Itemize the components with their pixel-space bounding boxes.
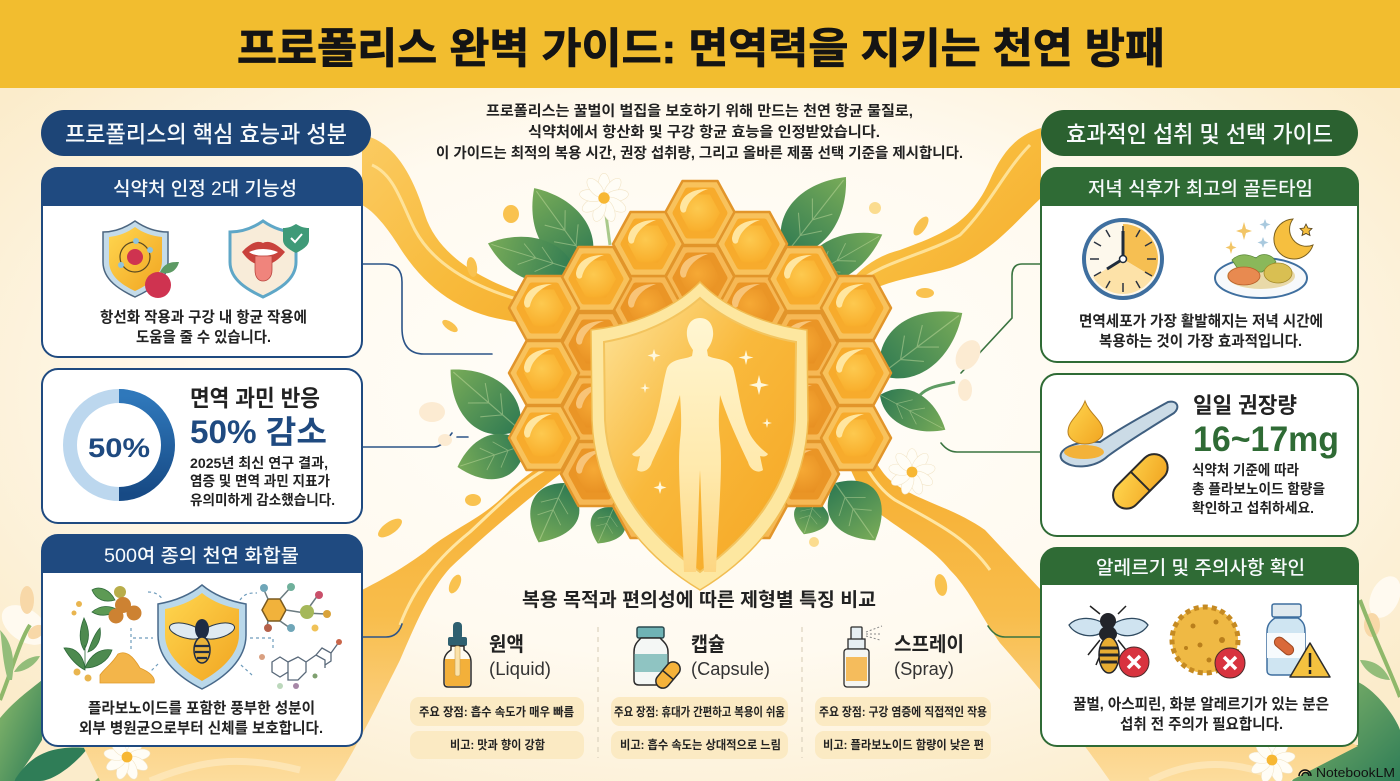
stat text: 염증 및 면역 과민 지표가 bbox=[190, 473, 330, 489]
comparison heading: 복용 목적과 편의성에 따른 제형별 특징 비교 bbox=[522, 589, 876, 611]
icon: molecules bbox=[259, 583, 342, 689]
donut chart: 50%: 50% bbox=[88, 433, 150, 463]
text: card body bbox=[100, 309, 307, 346]
panel: allergy caution bbox=[1041, 548, 1358, 746]
text: card body bbox=[1079, 313, 1323, 350]
panel: evening golden time bbox=[1041, 168, 1358, 362]
panel: daily dose bbox=[1041, 374, 1358, 536]
text: card body bbox=[79, 700, 323, 737]
dividers bbox=[598, 627, 802, 758]
form: spray: 주요 장점: 구강 염증에 직접적인 작용 bbox=[819, 705, 987, 719]
icon: pollen warning bbox=[1172, 607, 1245, 678]
stat text: 총 플라보노이드 함량을 bbox=[1192, 481, 1325, 497]
pill heading: left: 프로폴리스의 핵심 효능과 성분 bbox=[65, 121, 347, 147]
stat text bbox=[1192, 393, 1339, 516]
icon: plants and resin bbox=[64, 586, 154, 683]
panel: evening golden time: 저녁 식후가 최고의 골든타임 bbox=[1088, 178, 1313, 200]
honeycomb bbox=[509, 181, 891, 538]
text: card body: 면역세포가 가장 활발해지는 저녁 시간에 bbox=[1079, 313, 1323, 330]
form: liquid: 비고: 맛과 향이 강함 bbox=[450, 737, 545, 752]
intro text: 식약처에서 항산화 및 구강 항균 효능을 인정받았습니다. bbox=[528, 124, 880, 141]
icon: spray bottle bbox=[844, 626, 882, 687]
form: capsule: (Capsule) bbox=[691, 659, 770, 679]
panel: allergy caution: 알레르기 및 주의사항 확인 bbox=[1096, 557, 1305, 579]
corner plant: bottom left bbox=[0, 586, 128, 781]
icon: spoon and capsule bbox=[1061, 401, 1177, 514]
panel: FDA two functions: 식약처 인정 2대 기능성 bbox=[113, 178, 297, 200]
stat text bbox=[190, 385, 335, 508]
shield with human silhouette bbox=[591, 282, 808, 590]
panel: FDA two functions bbox=[42, 168, 362, 357]
icon: dinner plate with moon bbox=[1215, 219, 1313, 298]
stat text: 16~17mg bbox=[1193, 420, 1339, 459]
form: spray: 비고: 플라보노이드 함량이 낮은 편 bbox=[823, 737, 984, 752]
panel: 50 percent reduction bbox=[42, 369, 362, 523]
stat text: 식약처 기준에 따라 bbox=[1192, 462, 1299, 478]
stat text: 면역 과민 반응 bbox=[190, 385, 320, 411]
form: capsule: 비고: 흡수 속도는 상대적으로 느림 bbox=[620, 738, 781, 752]
stat text: 2025년 최신 연구 결과, bbox=[190, 455, 328, 471]
stat text: 일일 권장량 bbox=[1193, 393, 1297, 418]
icon: dropper bottle bbox=[444, 622, 471, 687]
intro text bbox=[436, 103, 963, 162]
stat text: 확인하고 섭취하세요. bbox=[1192, 500, 1314, 516]
title bar bbox=[0, 0, 1400, 88]
leaves behind honeycomb bbox=[432, 161, 977, 554]
connector lines bbox=[362, 264, 1041, 637]
text: card body: 항선화 작용과 구강 내 항균 작용에 bbox=[100, 309, 307, 326]
stat text: 50% 감소 bbox=[190, 414, 327, 450]
panel: 500 natural compounds: 500여 종의 천연 화합물 bbox=[104, 545, 299, 567]
icon: oral care shield bbox=[230, 221, 309, 297]
corner plant: bottom right bbox=[1292, 571, 1400, 781]
form: liquid: 주요 장점: 흡수 속도가 매우 빠름 bbox=[419, 704, 574, 719]
text: card body: 도움을 줄 수 있습니다. bbox=[136, 329, 271, 346]
pill heading: right bbox=[1041, 110, 1358, 156]
text: card body bbox=[1073, 696, 1329, 733]
flowers bbox=[103, 173, 1296, 781]
form: spray: (Spray) bbox=[894, 659, 954, 679]
form: spray: 스프레이 bbox=[894, 633, 964, 656]
form: liquid: (Liquid) bbox=[489, 659, 551, 679]
text: card body: 꿀벌, 아스피린, 화분 알레르기가 있는 분은 bbox=[1073, 696, 1329, 713]
icon: bee shield bbox=[158, 585, 246, 689]
text: card body: 섭취 전 주의가 필요합니다. bbox=[1120, 716, 1283, 733]
honey stream: upper left bbox=[362, 135, 584, 365]
donut chart: 50% bbox=[70, 396, 168, 494]
title: 프로폴리스 완벽 가이드: 면역력을 지키는 천연 방패 bbox=[237, 25, 1165, 72]
NotebookLM watermark: NotebookLM bbox=[1316, 766, 1395, 780]
intro text: 프로폴리스는 꿀벌이 벌집을 보호하기 위해 만드는 천연 항균 물질로, bbox=[486, 103, 913, 120]
text: card body: 복용하는 것이 가장 효과적입니다. bbox=[1099, 333, 1302, 350]
form: liquid: 원액 bbox=[489, 633, 524, 656]
honey droplets bbox=[375, 202, 949, 597]
form: liquid bbox=[410, 622, 584, 759]
icon: bottle and capsule bbox=[634, 627, 683, 691]
form: spray bbox=[815, 626, 991, 759]
form: capsule: 캡슐 bbox=[691, 633, 725, 656]
pill heading: right: 효과적인 섭취 및 선택 가이드 bbox=[1066, 121, 1333, 147]
icon: bee warning bbox=[1069, 606, 1149, 677]
dashed links bbox=[131, 592, 273, 675]
text: card body: 외부 병원균으로부터 신체를 보호합니다. bbox=[79, 720, 323, 737]
honey stream: upper right bbox=[812, 128, 1041, 342]
form: capsule bbox=[611, 627, 788, 759]
icon: antioxidant shield bbox=[103, 221, 179, 298]
form: capsule: 주요 장점: 휴대가 간편하고 복용이 쉬움 bbox=[614, 704, 785, 719]
pill heading: left bbox=[41, 110, 371, 156]
icon: medicine warning bbox=[1267, 604, 1330, 677]
intro text: 이 가이드는 최적의 복용 시간, 권장 섭취량, 그리고 올바른 제품 선택 기준을 제시합니다. bbox=[436, 145, 963, 162]
text: card body: 플라보노이드를 포함한 풍부한 성분이 bbox=[88, 700, 315, 717]
stat text: 유의미하게 감소했습니다. bbox=[190, 492, 335, 508]
honey stream: lower right bbox=[825, 415, 1358, 781]
panel: 500 natural compounds bbox=[42, 535, 362, 746]
icon: clock bbox=[1084, 220, 1162, 298]
honey stream: lower left bbox=[83, 450, 592, 781]
